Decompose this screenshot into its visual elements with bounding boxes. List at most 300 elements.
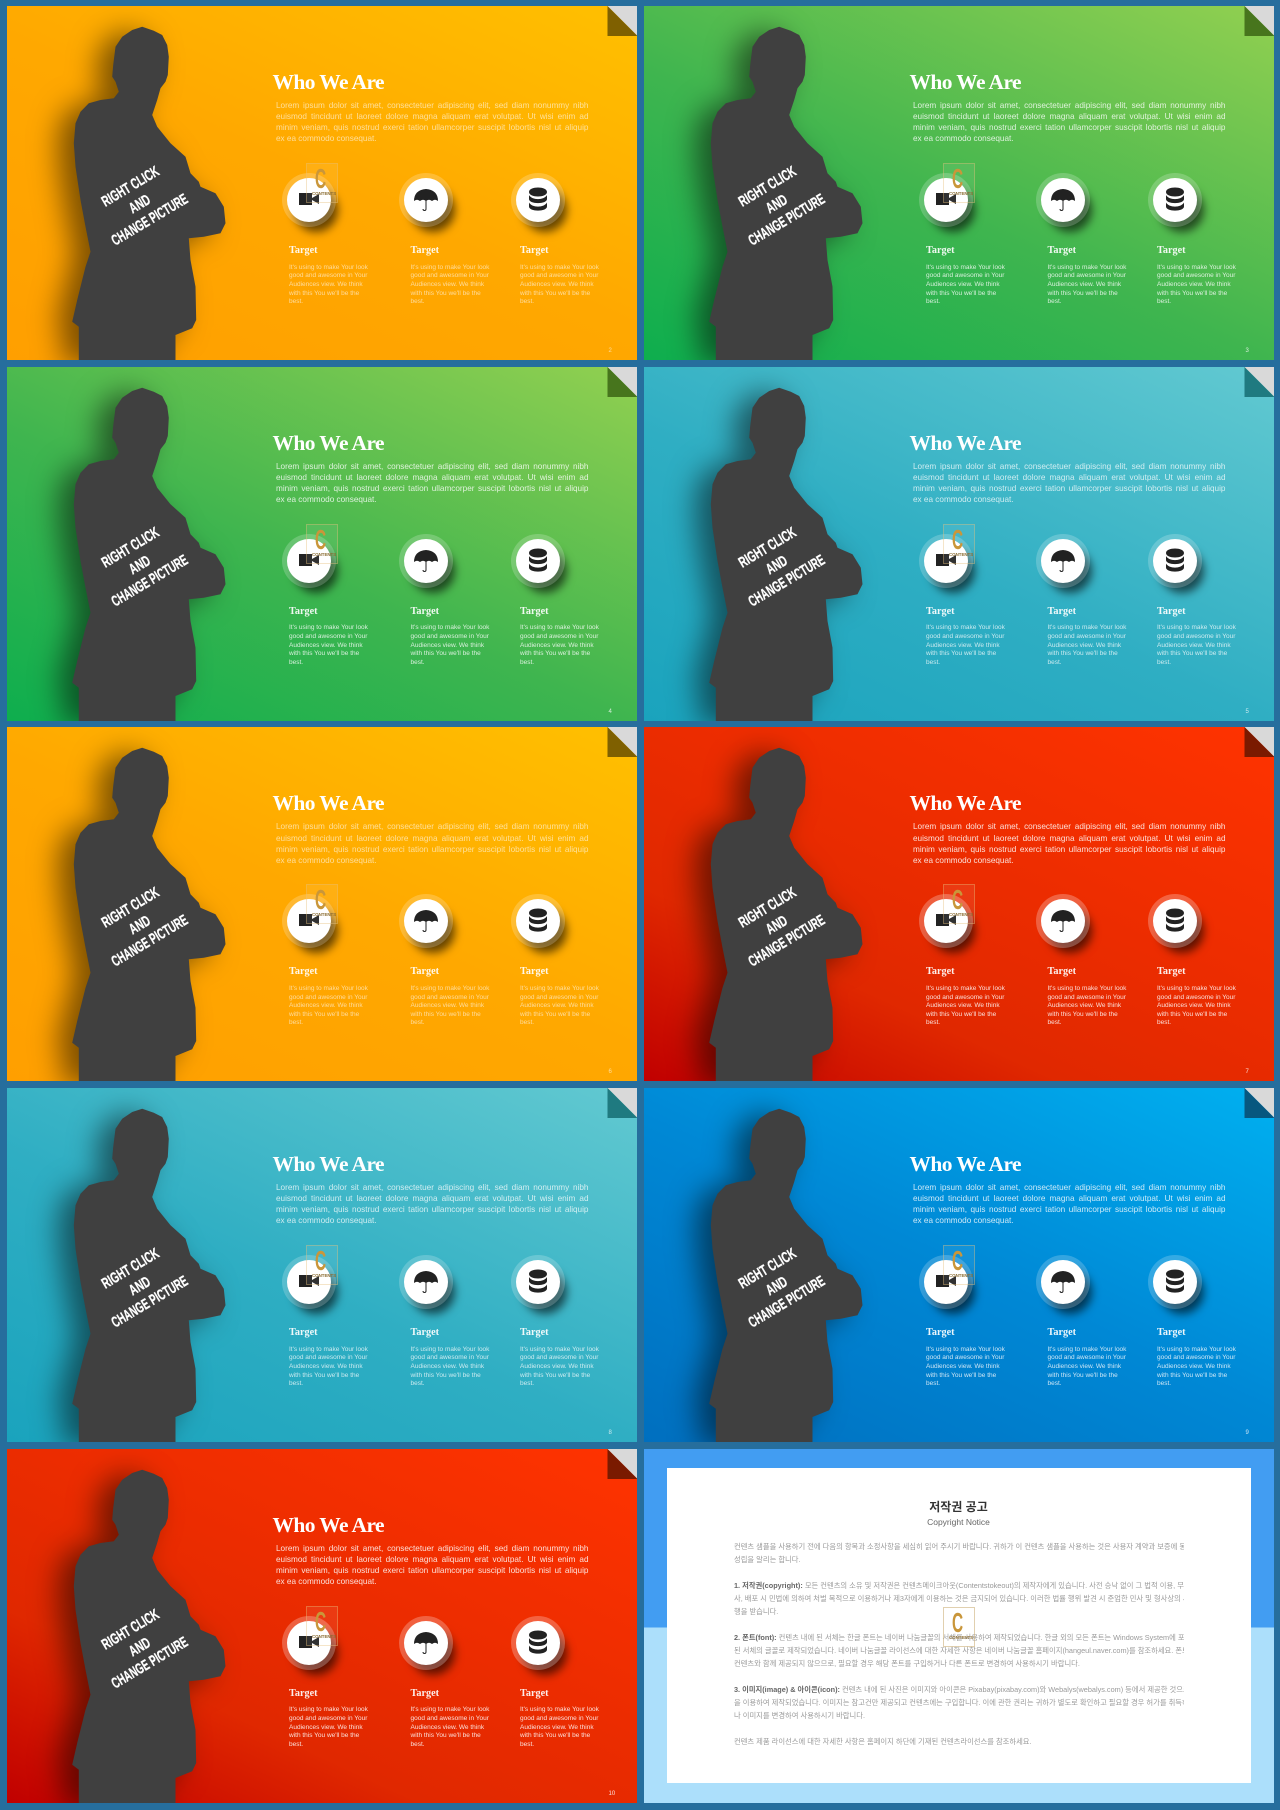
notice body xyxy=(734,1540,1184,1748)
column: database: It's using to make Your look xyxy=(1157,985,1236,992)
column: umbrella xyxy=(399,173,490,305)
column: database xyxy=(511,534,599,666)
silhouette placeholder: AND xyxy=(762,913,790,939)
silhouette placeholder xyxy=(678,16,862,360)
watermark xyxy=(306,524,338,564)
column: video: best. xyxy=(289,1019,303,1026)
column: umbrella xyxy=(403,1621,553,1761)
paragraph: Lorem ipsum dolor sit amet, consectetuer adipiscing elit, sed diam nonummy nibh xyxy=(276,1544,588,1553)
column: database xyxy=(516,1260,666,1400)
column: database: Audiences view. We think xyxy=(1157,1002,1231,1009)
column: umbrella xyxy=(399,534,490,666)
page number: 5 xyxy=(1246,709,1249,715)
page number: 10 xyxy=(608,1791,615,1797)
notice body: 사, 배포 시 민법에 의하여 처벌 목적으로 이용하거나 제3자에게 이용하는 것은 금지되어 있습니다. 이러한 법률 행위 발견 시 준엄한 민사 및 형사상의 시 xyxy=(734,1594,1184,1603)
column: database: Target xyxy=(1157,1327,1185,1338)
column: umbrella xyxy=(1036,534,1126,666)
column: database: Target xyxy=(1157,606,1185,617)
paragraph: minim veniam, quis nostrud exerci tation ullamcorper suscipit lobortis nisl ut aliquip xyxy=(276,484,588,493)
column: video: It's using to make Your look xyxy=(289,985,368,992)
page fold xyxy=(608,367,637,397)
paragraph xyxy=(276,101,588,143)
slide: orange 6 xyxy=(6,727,637,1081)
column: umbrella xyxy=(1036,894,1126,1026)
column: video: good and awesome in Your xyxy=(926,1354,1004,1361)
column: database: Audiences view. We think xyxy=(520,1002,594,1009)
silhouette placeholder: CHANGE PICTURE xyxy=(108,191,191,249)
column: database: with this You we'll be the xyxy=(520,1372,590,1379)
paragraph: euismod tincidunt ut laoreet dolore magna aliquam erat volutpat. Ut wisi enim ad xyxy=(276,1194,588,1203)
column: video: with this You we'll be the xyxy=(926,650,996,657)
silhouette placeholder xyxy=(38,14,227,360)
column: video xyxy=(282,894,368,1026)
silhouette placeholder: AND xyxy=(125,1273,153,1299)
paragraph: euismod tincidunt ut laoreet dolore magna aliquam erat volutpat. Ut wisi enim ad xyxy=(276,1555,588,1564)
column: video: best. xyxy=(289,1380,303,1387)
column: video: good and awesome in Your xyxy=(926,994,1004,1001)
column: umbrella: It's using to make Your look xyxy=(410,624,489,631)
column: video xyxy=(919,173,1005,305)
column: umbrella: Target xyxy=(1048,1327,1076,1338)
column: umbrella: with this You we'll be the xyxy=(1048,1372,1118,1379)
column: umbrella: good and awesome in Your xyxy=(1048,1354,1126,1361)
column: database: Target xyxy=(1157,966,1185,977)
paragraph: euismod tincidunt ut laoreet dolore magna aliquam erat volutpat. Ut wisi enim ad xyxy=(276,112,588,121)
paragraph: ex ea commodo consequat. xyxy=(913,1216,1014,1225)
column: video xyxy=(919,894,1005,1026)
column: database: with this You we'll be the xyxy=(1157,1372,1227,1379)
paragraph: ex ea commodo consequat. xyxy=(276,856,377,865)
page number: 8 xyxy=(608,1430,612,1436)
column: video: with this You we'll be the xyxy=(289,650,359,657)
column: video xyxy=(282,1255,368,1387)
column: video xyxy=(282,534,368,666)
paragraph: Lorem ipsum dolor sit amet, consectetuer adipiscing elit, sed diam nonummy nibh xyxy=(913,1183,1226,1192)
silhouette placeholder xyxy=(644,1088,1274,1442)
notice body: 성립을 알리는 합니다. xyxy=(734,1555,800,1564)
title: Who We Are xyxy=(272,70,384,94)
column: umbrella: Audiences view. We think xyxy=(1048,642,1121,649)
paragraph: ex ea commodo consequat. xyxy=(913,495,1014,504)
silhouette placeholder: AND xyxy=(125,1634,153,1660)
column: database: good and awesome in Your xyxy=(1157,994,1235,1001)
column: video: with this You we'll be the xyxy=(289,1732,359,1739)
column: database: good and awesome in Your xyxy=(520,1354,598,1361)
page fold xyxy=(608,727,637,757)
column: video: good and awesome in Your xyxy=(289,1715,367,1722)
column: video: with this You we'll be the xyxy=(926,1011,996,1018)
column: umbrella xyxy=(403,1260,553,1400)
slide: orange 2 xyxy=(6,6,637,360)
column: database: It's using to make Your look xyxy=(1157,264,1236,271)
column: umbrella: Target xyxy=(410,606,439,617)
column: database: It's using to make Your look xyxy=(1157,624,1236,631)
watermark: CONTENTS xyxy=(949,552,973,557)
column: video: Audiences view. We think xyxy=(926,1002,1000,1009)
page number: 6 xyxy=(608,1069,612,1075)
column: database: Target xyxy=(520,1327,548,1338)
column: database: best. xyxy=(520,659,534,666)
page fold xyxy=(6,1449,637,1489)
column: database: Target xyxy=(520,1688,548,1699)
column: umbrella: Target xyxy=(1048,966,1076,977)
column: video: It's using to make Your look xyxy=(289,624,368,631)
notice body: 2. 폰트(font): 컨텐츠 내에 된 서체는 한글 폰트는 네이버 나눔글꼴의 서체를 사용하여 제작되었습니다. 한글 외의 모든 폰트는 Windows System에 포함 xyxy=(734,1633,1184,1642)
column: database: Target xyxy=(520,966,548,977)
column: video: best. xyxy=(926,298,940,305)
column: database: with this You we'll be the xyxy=(520,1011,590,1018)
column: video xyxy=(919,534,1005,666)
column: umbrella: good and awesome in Your xyxy=(410,272,489,279)
watermark: CONTENTS xyxy=(949,191,973,196)
silhouette placeholder xyxy=(676,376,862,721)
column: database: good and awesome in Your xyxy=(520,633,598,640)
column: umbrella: Audiences view. We think xyxy=(1048,1363,1121,1370)
notice subtitle: Copyright Notice xyxy=(927,1517,990,1527)
paragraph: euismod tincidunt ut laoreet dolore magna aliquam erat volutpat. Ut wisi enim ad xyxy=(913,112,1226,121)
column: database xyxy=(511,173,599,305)
column: video: Target xyxy=(926,966,954,977)
paragraph: Lorem ipsum dolor sit amet, consectetuer adipiscing elit, sed diam nonummy nibh xyxy=(276,1183,588,1192)
column: video: Audiences view. We think xyxy=(289,1363,363,1370)
column: umbrella: Target xyxy=(410,1327,439,1338)
column: umbrella: best. xyxy=(410,659,425,666)
column: umbrella: Target xyxy=(1048,245,1076,256)
silhouette placeholder: CHANGE PICTURE xyxy=(745,551,828,610)
column: umbrella xyxy=(1036,173,1126,305)
title: Who We Are xyxy=(910,791,1021,815)
column: database: best. xyxy=(520,1741,534,1748)
paragraph: Lorem ipsum dolor sit amet, consectetuer adipiscing elit, sed diam nonummy nibh xyxy=(913,101,1226,110)
column: database: best. xyxy=(1157,659,1171,666)
paragraph xyxy=(913,462,1226,504)
column: database xyxy=(1148,894,1236,1026)
silhouette placeholder: AND xyxy=(762,1273,790,1299)
column: video: with this You we'll be the xyxy=(926,1372,996,1379)
column: umbrella: best. xyxy=(410,1741,425,1748)
column: database xyxy=(516,1621,666,1761)
column: umbrella: best. xyxy=(410,1019,425,1026)
paragraph: Lorem ipsum dolor sit amet, consectetuer adipiscing elit, sed diam nonummy nibh xyxy=(276,822,588,831)
column: video: It's using to make Your look xyxy=(926,624,1005,631)
column: umbrella: with this You we'll be the xyxy=(410,1011,481,1018)
title: Who We Are xyxy=(272,431,384,455)
column: umbrella: It's using to make Your look xyxy=(410,1706,489,1713)
watermark: C xyxy=(315,163,326,194)
column: umbrella: Audiences view. We think xyxy=(410,642,484,649)
watermark: C xyxy=(315,1245,326,1276)
title: Who We Are xyxy=(910,1152,1021,1176)
column: umbrella: It's using to make Your look xyxy=(1048,985,1126,992)
silhouette placeholder: RIGHT CLICK xyxy=(98,884,162,932)
column: database: good and awesome in Your xyxy=(520,994,598,1001)
column: video: good and awesome in Your xyxy=(289,994,367,1001)
slide: green 3 xyxy=(644,6,1274,360)
column: umbrella: Audiences view. We think xyxy=(410,1724,484,1731)
column: video: Audiences view. We think xyxy=(926,1363,1000,1370)
paragraph: Lorem ipsum dolor sit amet, consectetuer adipiscing elit, sed diam nonummy nibh xyxy=(276,101,588,110)
column: database: It's using to make Your look xyxy=(520,264,599,271)
column: video: Target xyxy=(926,245,954,256)
column: video: with this You we'll be the xyxy=(289,290,359,297)
column: umbrella: Audiences view. We think xyxy=(410,281,484,288)
watermark: C xyxy=(315,884,326,915)
column: umbrella: with this You we'll be the xyxy=(1048,290,1118,297)
slide: green 4 xyxy=(6,367,637,721)
column: umbrella: best. xyxy=(1048,659,1062,666)
watermark xyxy=(306,1245,338,1285)
column: umbrella: with this You we'll be the xyxy=(410,290,481,297)
notice title: 저작권 공고 xyxy=(929,1500,988,1514)
silhouette placeholder: RIGHT CLICK xyxy=(735,524,799,571)
silhouette placeholder: RIGHT CLICK xyxy=(735,163,799,210)
column: video: best. xyxy=(289,298,303,305)
column: database: best. xyxy=(520,1380,534,1387)
watermark: C xyxy=(952,884,963,915)
column: video: It's using to make Your look xyxy=(926,1346,1005,1353)
column: video xyxy=(286,1621,436,1761)
column: database: It's using to make Your look xyxy=(520,1346,599,1353)
column: umbrella: good and awesome in Your xyxy=(1048,633,1126,640)
paragraph: Lorem ipsum dolor sit amet, consectetuer adipiscing elit, sed diam nonummy nibh xyxy=(276,462,588,471)
watermark: C xyxy=(952,163,963,194)
column: database: with this You we'll be the xyxy=(520,1732,590,1739)
silhouette placeholder: CHANGE PICTURE xyxy=(108,1633,191,1692)
paragraph: Lorem ipsum dolor sit amet, consectetuer adipiscing elit, sed diam nonummy nibh xyxy=(913,822,1226,831)
paragraph: minim veniam, quis nostrud exerci tation ullamcorper suscipit lobortis nisl ut aliquip xyxy=(276,1566,588,1575)
column: video: best. xyxy=(289,1741,303,1748)
column: database xyxy=(1152,1260,1280,1400)
column: umbrella: It's using to make Your look xyxy=(410,985,489,992)
watermark xyxy=(306,1606,338,1646)
column: umbrella xyxy=(1040,1260,1190,1400)
column: video: Target xyxy=(289,1688,317,1699)
column: umbrella: with this You we'll be the xyxy=(1048,650,1118,657)
silhouette placeholder: AND xyxy=(125,552,153,578)
silhouette placeholder xyxy=(38,735,227,1081)
column: video: It's using to make Your look xyxy=(926,985,1005,992)
paragraph: ex ea commodo consequat. xyxy=(913,856,1014,865)
column: umbrella: best. xyxy=(410,1380,425,1387)
column: umbrella: with this You we'll be the xyxy=(410,1732,481,1739)
title: Who We Are xyxy=(910,70,1021,94)
paragraph: ex ea commodo consequat. xyxy=(276,134,377,143)
column: video: Audiences view. We think xyxy=(289,642,363,649)
column: database: Audiences view. We think xyxy=(520,1363,594,1370)
column: database: It's using to make Your look xyxy=(520,624,599,631)
silhouette placeholder: CHANGE PICTURE xyxy=(745,912,828,971)
column: database xyxy=(1148,173,1236,305)
column: video: It's using to make Your look xyxy=(289,1346,368,1353)
page fold xyxy=(1244,6,1274,36)
page fold xyxy=(608,1088,637,1118)
paragraph xyxy=(913,1182,1226,1227)
title: Who We Are xyxy=(272,1513,384,1537)
paragraph: ex ea commodo consequat. xyxy=(913,134,1014,143)
column: umbrella: Target xyxy=(1048,606,1076,617)
silhouette placeholder: CHANGE PICTURE xyxy=(108,551,191,610)
column: umbrella: It's using to make Your look xyxy=(410,1346,489,1353)
watermark: C xyxy=(952,1245,963,1276)
column: database: Audiences view. We think xyxy=(520,642,594,649)
column: video: best. xyxy=(926,659,940,666)
column: video xyxy=(282,173,368,305)
column: database: with this You we'll be the xyxy=(1157,290,1227,297)
watermark: C xyxy=(315,524,326,555)
column: database: It's using to make Your look xyxy=(520,985,599,992)
column: video: Target xyxy=(289,1327,317,1338)
column: database: good and awesome in Your xyxy=(520,272,598,279)
column: umbrella: It's using to make Your look xyxy=(1048,624,1126,631)
page number: 7 xyxy=(1246,1069,1249,1075)
column: umbrella xyxy=(399,894,490,1026)
column: video: Target xyxy=(289,606,317,617)
column: video: with this You we'll be the xyxy=(926,290,996,297)
column: umbrella: It's using to make Your look xyxy=(1048,264,1126,271)
watermark: CONTENTS xyxy=(312,191,336,196)
paragraph xyxy=(276,462,588,504)
column: umbrella: Target xyxy=(410,966,439,977)
watermark: CONTENTS xyxy=(312,1273,336,1278)
column: umbrella: good and awesome in Your xyxy=(410,633,489,640)
title: Who We Are xyxy=(910,431,1021,455)
silhouette placeholder: CHANGE PICTURE xyxy=(108,1273,191,1331)
paragraph xyxy=(276,822,588,865)
column: video: best. xyxy=(289,659,303,666)
paragraph: minim veniam, quis nostrud exerci tation ullamcorper suscipit lobortis nisl ut aliquip xyxy=(913,1205,1226,1214)
column: video: best. xyxy=(926,1380,940,1387)
silhouette placeholder xyxy=(6,1449,637,1803)
column: database: It's using to make Your look xyxy=(1157,1346,1236,1353)
paragraph: minim veniam, quis nostrud exerci tation ullamcorper suscipit lobortis nisl ut aliquip xyxy=(276,845,588,854)
column: video: Audiences view. We think xyxy=(926,281,1000,288)
notice body: 컨텐츠 제품 라이선스에 대한 자세한 사항은 홈페이지 하단에 기재된 컨텐츠라이선스를 참조하세요. xyxy=(734,1737,1032,1746)
column: database: Audiences view. We think xyxy=(1157,281,1231,288)
column: database: Target xyxy=(520,606,548,617)
watermark: CONTENTS xyxy=(312,552,336,557)
slide: red 7 xyxy=(644,727,1274,1081)
page fold xyxy=(608,6,637,36)
column: video: Audiences view. We think xyxy=(926,642,1000,649)
column: video: good and awesome in Your xyxy=(289,633,367,640)
column: umbrella: It's using to make Your look xyxy=(1048,1346,1126,1353)
paragraph xyxy=(276,1543,588,1587)
slide: teal 8 xyxy=(6,1088,637,1442)
page number: 9 xyxy=(1246,1430,1249,1436)
silhouette placeholder xyxy=(40,1098,226,1442)
column: video: It's using to make Your look xyxy=(289,1706,368,1713)
column: video: with this You we'll be the xyxy=(289,1372,359,1379)
column: database: best. xyxy=(520,298,534,305)
paragraph: euismod tincidunt ut laoreet dolore magna aliquam erat volutpat. Ut wisi enim ad xyxy=(276,834,588,843)
watermark: CONTENTS xyxy=(949,1635,973,1640)
paragraph: ex ea commodo consequat. xyxy=(276,1577,377,1586)
column: video: Target xyxy=(926,606,954,617)
page number: 4 xyxy=(608,709,612,715)
column: video: good and awesome in Your xyxy=(926,633,1004,640)
paragraph: minim veniam, quis nostrud exerci tation ullamcorper suscipit lobortis nisl ut aliquip xyxy=(276,123,588,132)
watermark: C xyxy=(315,1606,326,1637)
column: database: good and awesome in Your xyxy=(1157,633,1235,640)
page number: 3 xyxy=(1246,348,1249,354)
column: umbrella: Audiences view. We think xyxy=(1048,1002,1121,1009)
silhouette placeholder: AND xyxy=(125,191,153,217)
notice body: 행을 받습니다. xyxy=(734,1607,778,1616)
column: database: Audiences view. We think xyxy=(520,1724,594,1731)
watermark xyxy=(943,884,975,924)
column: umbrella: Audiences view. We think xyxy=(1048,281,1121,288)
paragraph xyxy=(913,101,1226,143)
silhouette placeholder: RIGHT CLICK xyxy=(98,163,162,210)
column: umbrella: Target xyxy=(410,1688,439,1699)
notice body: 을 이용하여 제작되었습니다. 이미지는 참고건만 제공되고 컨텐츠에는 구입합니다. 이에 관한 권리는 귀하가 별도로 확인하고 필요할 경우 허가를 취득하거 xyxy=(734,1698,1184,1707)
watermark: C xyxy=(952,524,963,555)
paragraph: euismod tincidunt ut laoreet dolore magna aliquam erat volutpat. Ut wisi enim ad xyxy=(913,473,1226,482)
column: video: good and awesome in Your xyxy=(289,1354,367,1361)
column: video: good and awesome in Your xyxy=(289,272,367,279)
paragraph: euismod tincidunt ut laoreet dolore magna aliquam erat volutpat. Ut wisi enim ad xyxy=(276,473,588,482)
column: umbrella: best. xyxy=(410,298,425,305)
column: database xyxy=(511,894,599,1026)
column: database: with this You we'll be the xyxy=(1157,1011,1227,1018)
notice body: 나 이미지를 변경하여 사용하시기 바랍니다. xyxy=(734,1711,865,1720)
column: video: Audiences view. We think xyxy=(289,281,363,288)
notice body: 1. 저작권(copyright): 모든 컨텐츠의 소유 및 저작권은 컨텐츠메이크아웃(Contentstokeout)의 제작자에게 있습니다. 사전 승낙 없이 그 법적 이용, 무단전 xyxy=(734,1581,1184,1590)
silhouette placeholder xyxy=(40,376,226,721)
slide: teal 5 xyxy=(644,367,1274,721)
paragraph: ex ea commodo consequat. xyxy=(276,495,377,504)
silhouette placeholder: CHANGE PICTURE xyxy=(745,191,828,249)
column: umbrella: Target xyxy=(410,245,439,256)
column: umbrella: best. xyxy=(1048,1380,1062,1387)
column: umbrella: good and awesome in Your xyxy=(410,994,489,1001)
silhouette placeholder: CHANGE PICTURE xyxy=(108,912,191,971)
column: video: Audiences view. We think xyxy=(289,1002,363,1009)
column: database: best. xyxy=(1157,298,1171,305)
title: Who We Are xyxy=(272,1152,384,1176)
column: database: It's using to make Your look xyxy=(520,1706,599,1713)
page number: 2 xyxy=(608,348,612,354)
column: umbrella: best. xyxy=(1048,1019,1062,1026)
watermark: CONTENTS xyxy=(949,1273,973,1278)
silhouette placeholder: RIGHT CLICK xyxy=(735,1245,799,1292)
paragraph: euismod tincidunt ut laoreet dolore magna aliquam erat volutpat. Ut wisi enim ad xyxy=(913,834,1226,843)
column: database xyxy=(1148,534,1236,666)
silhouette placeholder: AND xyxy=(762,191,790,217)
watermark xyxy=(943,1607,975,1647)
column: umbrella: Audiences view. We think xyxy=(410,1363,484,1370)
watermark xyxy=(306,884,338,924)
paragraph: minim veniam, quis nostrud exerci tation ullamcorper suscipit lobortis nisl ut aliquip xyxy=(913,123,1226,132)
paragraph xyxy=(913,822,1226,865)
column: umbrella: best. xyxy=(1048,298,1062,305)
column: database: Audiences view. We think xyxy=(1157,642,1231,649)
column: database: good and awesome in Your xyxy=(1157,1354,1235,1361)
column: video: Target xyxy=(289,245,317,256)
column: umbrella: good and awesome in Your xyxy=(1048,272,1126,279)
column: umbrella: good and awesome in Your xyxy=(1048,994,1126,1001)
column: video: Target xyxy=(289,966,317,977)
column: database: with this You we'll be the xyxy=(520,650,590,657)
page fold xyxy=(1244,367,1274,397)
page fold xyxy=(644,1088,1274,1128)
column: umbrella: good and awesome in Your xyxy=(410,1715,489,1722)
column: video: Audiences view. We think xyxy=(289,1724,363,1731)
column: umbrella: with this You we'll be the xyxy=(410,650,481,657)
column: database: best. xyxy=(1157,1380,1171,1387)
column: database: good and awesome in Your xyxy=(520,1715,598,1722)
column: umbrella: It's using to make Your look xyxy=(410,264,489,271)
